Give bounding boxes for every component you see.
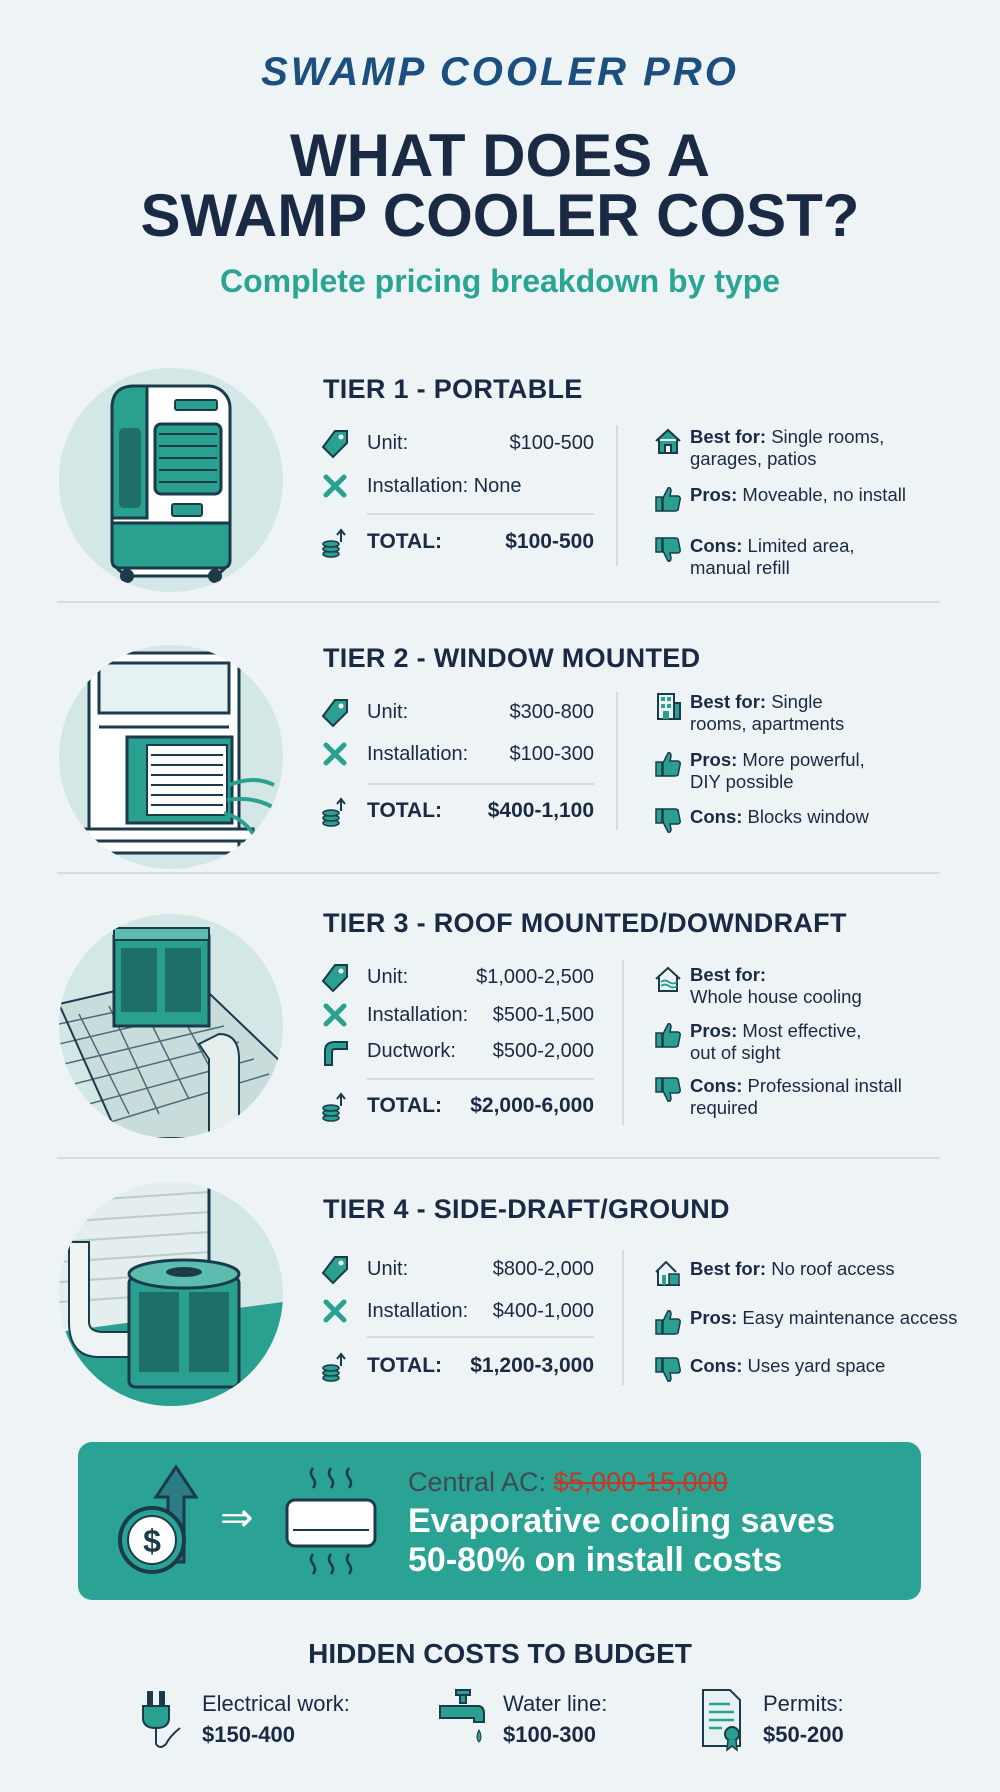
illustration: window cooler xyxy=(59,645,283,869)
heading: hidden costs: HIDDEN COSTS TO BUDGET xyxy=(308,1638,692,1669)
cost: unit: Unit: xyxy=(367,1258,408,1280)
pros xyxy=(655,484,906,512)
icon: dollar coin with arrow: $ xyxy=(143,1523,161,1559)
pros: DIY possible xyxy=(690,771,794,792)
cost: total: $400-1,100 xyxy=(488,799,594,822)
cost: ductwork xyxy=(324,1040,594,1066)
text: central AC: Central AC: $5,000-15,000 xyxy=(408,1467,728,1497)
best for: garages, patios xyxy=(690,448,817,469)
cost: installation xyxy=(324,1004,594,1026)
pros xyxy=(655,1020,861,1063)
best for: rooms, apartments xyxy=(690,713,844,734)
cost: total: $2,000-6,000 xyxy=(470,1094,594,1117)
cost: unit xyxy=(322,699,594,728)
panel: tier 1 portable xyxy=(59,368,906,592)
best for: Best for: Single rooms, xyxy=(690,426,884,447)
brand logo: SWAMP COOLER PRO xyxy=(261,50,739,94)
text: savings: Evaporative cooling saves xyxy=(408,1502,835,1540)
cons xyxy=(655,1355,885,1382)
cons xyxy=(655,535,855,578)
title: WHAT DOES A xyxy=(290,122,710,189)
best for: Whole house cooling xyxy=(690,986,862,1007)
pros: Pros: Most effective, xyxy=(690,1020,861,1041)
cost: installation xyxy=(324,1300,594,1322)
cost: unit xyxy=(322,1256,594,1284)
cons: Cons: Uses yard space xyxy=(690,1355,885,1376)
subtitle: Complete pricing breakdown by type xyxy=(220,263,780,299)
cost: total: TOTAL: xyxy=(367,1094,442,1117)
title xyxy=(141,122,859,249)
illustration: ground cooler xyxy=(59,1182,283,1406)
pros xyxy=(655,749,865,792)
heading: TIER 1 - PORTABLE xyxy=(323,374,583,404)
pros: out of sight xyxy=(690,1042,781,1063)
item: water line: $100-300 xyxy=(503,1722,596,1747)
text: savings xyxy=(408,1502,835,1579)
item: permits xyxy=(702,1689,844,1752)
heading: TIER 3 - ROOF MOUNTED/DOWNDRAFT xyxy=(323,908,847,938)
cost: unit xyxy=(322,430,594,458)
item: electrical work: $150-400 xyxy=(202,1722,295,1747)
cost: installation: Installation: xyxy=(367,1300,468,1322)
cost: installation: Installation: None xyxy=(367,475,522,497)
pros: Pros: Moveable, no install xyxy=(690,484,906,505)
title: SWAMP COOLER COST? xyxy=(141,182,859,249)
pros xyxy=(655,1307,957,1335)
icon: dollar coin with arrow xyxy=(118,1464,198,1574)
best for: Best for: Single xyxy=(690,691,823,712)
text: savings: 50-80% on install costs xyxy=(408,1541,782,1579)
cons: manual refill xyxy=(690,557,790,578)
callout: savings banner xyxy=(78,1442,921,1600)
cost: installation: $400-1,000 xyxy=(493,1300,594,1322)
best for xyxy=(655,964,862,1007)
cost: total: TOTAL: xyxy=(367,799,442,822)
cost: total: TOTAL: xyxy=(367,1354,442,1377)
cost: total xyxy=(322,798,594,827)
icon: plug xyxy=(142,1691,181,1748)
cost: total: $1,200-3,000 xyxy=(470,1354,594,1377)
cons xyxy=(655,1075,902,1118)
best for xyxy=(655,426,884,469)
icon: AC unit xyxy=(286,1467,376,1575)
item: permits: $50-200 xyxy=(763,1722,844,1747)
cost: unit: Unit: xyxy=(367,701,408,723)
cost: total: $100-500 xyxy=(505,530,594,553)
item: electrical work xyxy=(142,1691,350,1748)
cost: total xyxy=(322,528,594,558)
cost: ductwork: $500-2,000 xyxy=(493,1040,594,1062)
best for: Best for: No roof access xyxy=(690,1258,895,1279)
item: electrical work: Electrical work: xyxy=(202,1691,350,1716)
pros: Pros: More powerful, xyxy=(690,749,865,770)
heading: TIER 4 - SIDE-DRAFT/GROUND xyxy=(323,1194,730,1224)
cost: unit xyxy=(322,964,594,992)
cost: ductwork: Ductwork: xyxy=(367,1040,456,1062)
cost: total xyxy=(322,1352,594,1382)
cost: unit: Unit: xyxy=(367,966,408,988)
icon: faucet xyxy=(439,1689,485,1743)
illustration: portable cooler xyxy=(59,368,283,592)
cost: installation xyxy=(324,742,594,766)
cost: unit: $1,000-2,500 xyxy=(476,966,594,988)
cost: unit: $800-2,000 xyxy=(493,1258,594,1280)
best for: Best for: xyxy=(690,964,766,985)
illustration: roof cooler xyxy=(59,914,283,1138)
cons: Cons: Professional install xyxy=(690,1075,902,1096)
cons: Cons: Limited area, xyxy=(690,535,855,556)
panel: tier 4 side-draft xyxy=(59,1182,957,1406)
pros: Pros: Easy maintenance access xyxy=(690,1307,957,1328)
cost: unit: $300-800 xyxy=(509,701,594,723)
icon: document xyxy=(702,1689,741,1752)
item: permits: Permits: xyxy=(763,1691,844,1716)
cost: installation: $500-1,500 xyxy=(493,1004,594,1026)
best for xyxy=(657,691,844,734)
item: water line xyxy=(439,1689,607,1747)
best for xyxy=(655,1258,895,1286)
item: water line: Water line: xyxy=(503,1691,607,1716)
cost: total xyxy=(322,1092,594,1122)
heading: TIER 2 - WINDOW MOUNTED xyxy=(323,643,700,673)
cons xyxy=(655,806,869,833)
arrow: ⇒ xyxy=(220,1496,254,1540)
panel: tier 3 roof mounted xyxy=(59,908,902,1138)
cost: total: TOTAL: xyxy=(367,530,442,553)
cons: required xyxy=(690,1097,758,1118)
cost: installation: $100-300 xyxy=(509,743,594,765)
cons: Cons: Blocks window xyxy=(690,806,869,827)
panel: tier 2 window mounted xyxy=(59,643,869,869)
cost: installation: Installation: xyxy=(367,743,468,765)
cost: unit: $100-500 xyxy=(509,432,594,454)
cost: unit: Unit: xyxy=(367,432,408,454)
cost: installation: Installation: xyxy=(367,1004,468,1026)
